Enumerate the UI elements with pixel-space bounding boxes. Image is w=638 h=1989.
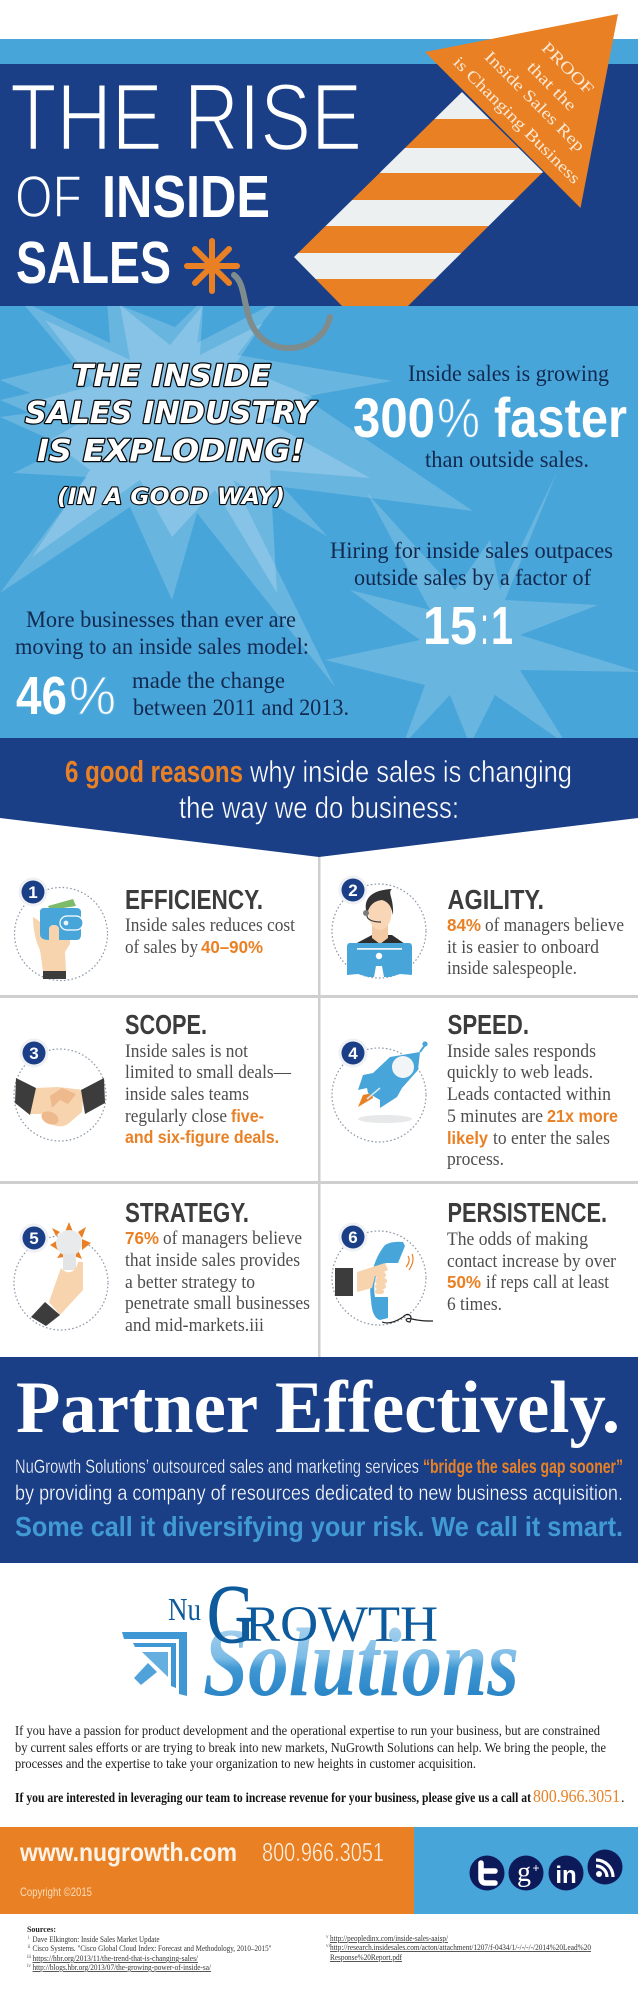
call to action: . [621, 1791, 624, 1806]
efficiency body: of sales by [125, 938, 199, 958]
website: www.nugrowth.com [19, 1837, 237, 1867]
stat: 15:1: 15 [423, 596, 477, 656]
badge 6 [338, 1222, 368, 1252]
stat: 46%: between 2011 and 2013. [133, 695, 349, 720]
starburst: left inner [32, 305, 370, 593]
title word: SALES: SALES [16, 230, 171, 296]
badge 4 [338, 1038, 368, 1068]
rocket head with proof text [425, 14, 618, 208]
logo: NuGrowth Solutions [122, 1568, 519, 1717]
icon: rocket body [290, 90, 550, 306]
card 1: efficiency [14, 878, 296, 980]
stat: 300% faster: than outside sales. [425, 447, 589, 472]
scope body: limited to small deals— [125, 1063, 291, 1083]
card 6: persistence [332, 1197, 616, 1325]
starburst: left [0, 300, 473, 687]
speed body: to enter the sales [493, 1129, 610, 1149]
footer panel: contact [0, 1827, 414, 1914]
icon: rocket [332, 1041, 428, 1142]
icon: rss [588, 1850, 622, 1884]
agility body: inside salespeople. [447, 959, 577, 979]
card 4: speed [332, 1009, 618, 1170]
efficiency body [125, 916, 296, 958]
reasons banner: why inside sales is changing [249, 754, 572, 789]
sources: left column: Dave Elkington: Inside Sales Market Update [32, 1935, 160, 1944]
badge 1 [18, 878, 48, 906]
logo mark [122, 1632, 187, 1696]
stat: 46% [15, 607, 349, 726]
sources: right column [326, 1934, 591, 1962]
icon: twitter [470, 1856, 504, 1890]
icon: headset agent [332, 884, 426, 978]
scope body: regularly close [125, 1107, 227, 1127]
persistence body: contact increase by over [447, 1252, 616, 1272]
reasons grid dividers [0, 850, 638, 1357]
call to action: 800.966.3051 [533, 1786, 620, 1806]
company paragraph: processes and the expertise to take your organization to new heights in customer acquisition. [15, 1757, 476, 1772]
footer panel: social [414, 1827, 638, 1914]
sources: left column: i [28, 1936, 30, 1941]
comic headline: SALES INDUSTRY [25, 396, 318, 431]
title [10, 64, 362, 296]
title word: OF: OF [15, 164, 82, 230]
proof line 3: Inside Sales Rep [481, 47, 589, 155]
badge 2: 2 [348, 881, 358, 900]
partner headline: Partner Effectively. [16, 1367, 620, 1449]
speed body: 21x more [547, 1106, 618, 1126]
badge 3 [20, 1038, 48, 1068]
proof line 1: PROOF [538, 38, 598, 98]
stat: 46%: % [69, 666, 116, 726]
stat: 300% faster: 300 [353, 386, 435, 449]
sources: left column: iv [27, 1964, 31, 1969]
icon: google plus [508, 1856, 544, 1890]
efficiency body: Inside sales reduces cost [125, 916, 296, 936]
icon: telephone in hand [332, 1231, 433, 1325]
stat: 15:1: outside sales by a factor of [354, 565, 591, 590]
strategy body: and mid-markets.iii [125, 1316, 264, 1336]
sources: left column: Cisco Systems. "Cisco Global Cloud Index: Forecast and Methodology, 2010–2015" [32, 1944, 272, 1953]
scope title: SCOPE. [125, 1009, 207, 1040]
strategy body: 76% [125, 1228, 159, 1248]
persistence body: The odds of making [447, 1230, 588, 1250]
badge 2 [338, 876, 368, 904]
sources: right column: Response%20Report.pdf [330, 1953, 402, 1962]
badge 1: 1 [28, 883, 38, 902]
badge 3: 3 [29, 1044, 39, 1063]
logo word: G: G [207, 1568, 255, 1661]
sources: left column: Sources: [27, 1924, 56, 1934]
comic headline: THE INSIDE [72, 359, 272, 394]
speed body: process. [447, 1150, 504, 1170]
speed body [447, 1042, 618, 1170]
speed body: Inside sales responds [447, 1042, 596, 1062]
stat: 46%: 46 [16, 666, 67, 726]
partner text: NuGrowth Solutions’ outsourced sales and marketing services [15, 1457, 419, 1478]
logo word: ROWTH: ROWTH [245, 1597, 438, 1653]
strategy body: a better strategy to [125, 1273, 255, 1293]
partner panel [0, 1357, 638, 1563]
sources: right column: http://peopledinx.com/inside-sales-aaisp/ [330, 1934, 449, 1943]
stat: 300% faster [353, 361, 627, 472]
persistence body [447, 1230, 616, 1315]
sources: right column: http://research.insidesales.com/acton/attachment/1207/f-0434/1/-/-/-/-/2014%20Lead%20 [330, 1943, 591, 1952]
icon: light bulb in hand [14, 1222, 108, 1330]
phone: 800.966.3051 [262, 1837, 384, 1867]
speed body: likely [447, 1128, 488, 1148]
icon: fuse [234, 275, 330, 348]
persistence body: if reps call at least [486, 1273, 610, 1293]
badge 6: 6 [348, 1228, 358, 1247]
speed body: quickly to web leads. [447, 1063, 593, 1083]
strategy body: that inside sales provides [125, 1251, 300, 1271]
scope body: five- [231, 1106, 264, 1126]
comic headline [25, 359, 318, 510]
reasons banner: the way we do business: [179, 790, 459, 825]
sources: left column [27, 1924, 272, 1972]
icon: handshake [14, 1049, 106, 1141]
scope body: and six-figure deals. [125, 1127, 279, 1147]
title line: THE RISE: THE RISE [10, 64, 362, 171]
stat: 46%: made the change [132, 668, 285, 693]
sources: right column: v [326, 1935, 329, 1940]
reasons banner [0, 738, 638, 857]
speed title: SPEED. [448, 1009, 529, 1040]
stat: 300% faster: Inside sales is growing [408, 361, 609, 386]
agility body: 84% [447, 915, 481, 935]
icon: google plus: + [532, 1861, 540, 1875]
persistence body: 50% [447, 1272, 481, 1292]
scope body: Inside sales is not [125, 1042, 249, 1062]
scope body [125, 1042, 291, 1147]
reasons heading: 6 good reasons [65, 754, 243, 789]
stat: 15:1: 1 [491, 596, 513, 656]
card 3: scope [14, 1009, 291, 1147]
speed body: Leads contacted within [447, 1085, 611, 1105]
company paragraph [15, 1724, 606, 1772]
strategy body: of managers believe [163, 1229, 302, 1249]
stat: 46%: More businesses than ever are [26, 607, 296, 632]
stat: 15:1: : [480, 596, 489, 656]
stat: 46%: moving to an inside sales model: [15, 634, 309, 659]
icon: fuse spark [187, 241, 237, 291]
sources [27, 1924, 591, 1972]
proof line 4: is Changing Business [449, 53, 584, 188]
badge 4: 4 [348, 1044, 358, 1063]
strategy body [125, 1228, 310, 1336]
agility body [447, 915, 624, 979]
agility title: AGILITY. [448, 884, 544, 915]
comic headline: IS EXPLODING! [37, 434, 305, 469]
hero panel [0, 39, 638, 745]
sources: left column: https://hbr.org/2013/11/the-trend-that-is-changing-sales/ [32, 1954, 199, 1963]
sources: right column: vi [326, 1944, 330, 1949]
top navy banner [0, 64, 638, 306]
efficiency body: 40–90% [201, 937, 263, 957]
title word: INSIDE: INSIDE [102, 164, 270, 230]
icon: linkedin [548, 1856, 584, 1890]
agility body: of managers believe [485, 916, 624, 936]
badge 5: 5 [29, 1229, 39, 1248]
icon: google plus: g [517, 1857, 531, 1888]
strategy body: penetrate small businesses [125, 1294, 310, 1314]
efficiency title: EFFICIENCY. [125, 884, 263, 915]
speed body: 5 minutes are [447, 1107, 543, 1127]
comic headline: (IN A GOOD WAY) [57, 485, 285, 510]
logo word: Nu: Nu [168, 1591, 201, 1627]
stat: 15:1 [330, 538, 613, 656]
stat: 15:1: Hiring for inside sales outpaces [330, 538, 613, 563]
sources: left column: http://blogs.hbr.org/2013/07/the-growing-power-of-inside-sa/ [32, 1963, 212, 1972]
strategy title: STRATEGY. [125, 1197, 249, 1228]
proof line 2: that the [523, 57, 581, 115]
sources: left column: ii [28, 1945, 31, 1950]
icon: wallet in hand [14, 888, 108, 980]
scope body: inside sales teams [125, 1085, 249, 1105]
logo word: Solutions: Solutions [203, 1609, 519, 1717]
icon: linkedin: in [555, 1862, 577, 1889]
stat: 300% faster: % [437, 386, 480, 449]
card 5: strategy [14, 1197, 310, 1336]
sources: left column: iii [27, 1955, 32, 1960]
card 2: agility [332, 876, 624, 979]
call to action: If you are interested in leveraging our team to increase revenue for your business, please give us a call at [15, 1791, 531, 1806]
starburst: right [325, 472, 638, 745]
copyright: Copyright ©2015 [20, 1885, 92, 1899]
badge 5 [20, 1224, 48, 1252]
persistence body: 6 times. [447, 1295, 502, 1315]
agility body: it is easier to onboard [447, 938, 600, 958]
partner text [15, 1457, 623, 1505]
